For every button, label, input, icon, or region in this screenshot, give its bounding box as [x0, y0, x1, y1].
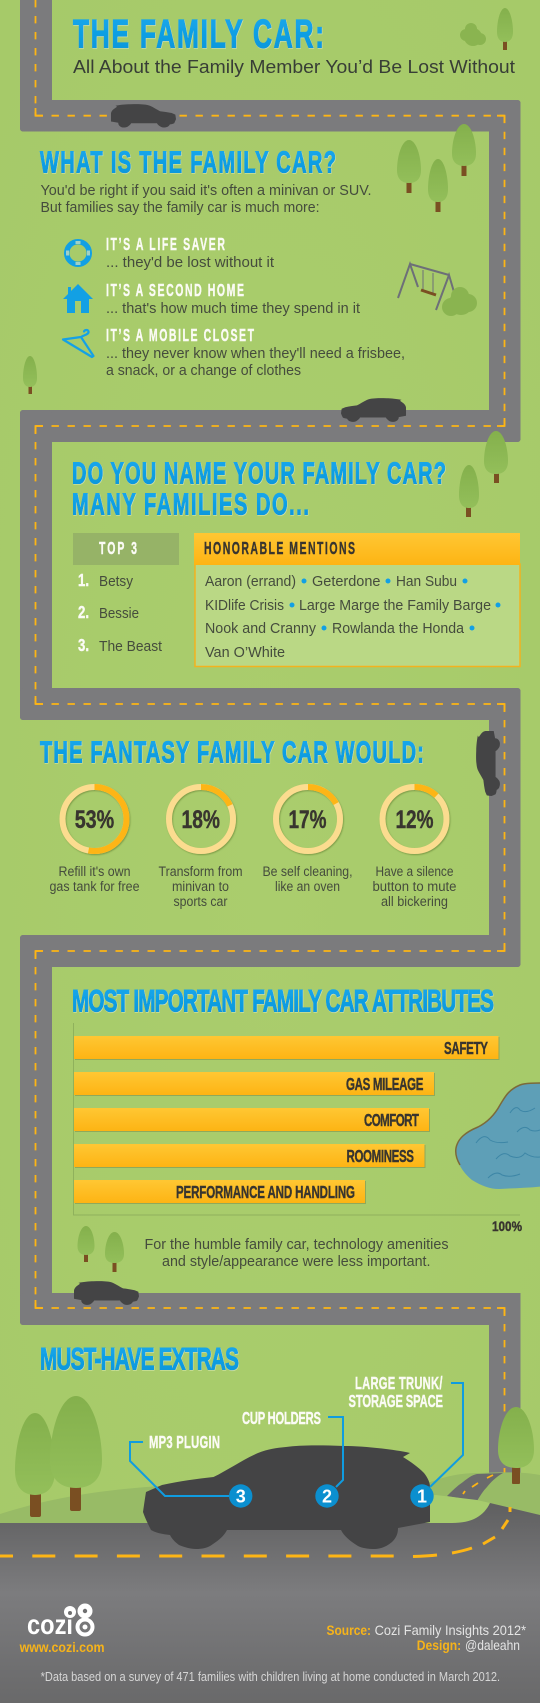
bar: roominess: [74, 1144, 426, 1168]
callout: mp3 plugin: 3: [236, 1486, 246, 1506]
heading: MANY FAMILIES DO...: [72, 489, 309, 522]
icon: tree top right: [497, 8, 513, 50]
donut 53 percent: Refill it's own: [58, 864, 130, 879]
section: what is the family car: [40, 147, 405, 379]
intro text: You'd be right if you said it's often a minivan or SUV.: [40, 182, 372, 199]
panel: honorable mentions: Van O’White: [205, 644, 285, 661]
panel: honorable mentions: Han Subu: [396, 573, 457, 590]
donut 17 percent: [262, 787, 352, 894]
bar: gas mileage: GAS MILEAGE: [346, 1076, 424, 1095]
panel: honorable mentions: Geterdone: [312, 573, 380, 590]
section: fantasy family car: [40, 737, 456, 909]
ground road: [0, 1503, 540, 1703]
panel: honorable mentions: HONORABLE MENTIONS: [204, 539, 355, 559]
donut 18 percent: 18%: [182, 806, 220, 834]
donut 53 percent: [50, 787, 140, 894]
callout: large trunk: [348, 1375, 463, 1508]
callout: cup holders: [242, 1410, 343, 1508]
donut 18 percent: [158, 787, 242, 909]
donut 17 percent: Be self cleaning,: [262, 864, 352, 879]
icon: tree on right: [498, 1407, 534, 1484]
icon: bush top right: [460, 23, 486, 46]
callout: cup holders: 2: [322, 1486, 332, 1506]
panel: top 3: TOP 3: [99, 539, 137, 559]
intro text: [40, 182, 372, 216]
callout: mp3 plugin: [130, 1434, 252, 1508]
hill: [0, 1472, 540, 1530]
road centre dashes: [36, 0, 504, 1474]
icon: car on second road: [341, 398, 406, 422]
callout: large trunk: 1: [417, 1486, 427, 1506]
source credit: [326, 1622, 527, 1653]
item: mobile closet: ... they never know when they'll need a frisbee,: [106, 345, 405, 362]
item: mobile closet: [106, 326, 405, 379]
source credit: Design:: [417, 1637, 461, 1653]
section: attributes: [72, 983, 522, 1270]
panel: top 3: 2.: [78, 602, 89, 622]
donut 17 percent: 17%: [288, 806, 326, 834]
panel: top 3: 3.: [78, 635, 89, 655]
light grass verge: [420, 1495, 490, 1526]
item: life saver: IT’S A LIFE SAVER: [106, 235, 225, 255]
item: life saver: [106, 235, 275, 271]
heading: [72, 458, 446, 522]
axis label: 100%: [492, 1218, 522, 1234]
heading: WHAT IS THE FAMILY CAR?: [40, 147, 336, 180]
callout: large trunk: LARGE TRUNK/: [355, 1375, 442, 1394]
icon: house: [63, 284, 93, 313]
item: second home: ... that's how much time they spend in it: [106, 300, 361, 317]
heading: THE FANTASY FAMILY CAR WOULD:: [40, 737, 424, 770]
item: mobile closet: a snack, or a change of clothes: [106, 362, 301, 379]
bar: performance and handling: PERFORMANCE AND HANDLING: [176, 1184, 355, 1203]
donut 18 percent: sports car: [174, 894, 228, 909]
panel: top 3: [73, 533, 179, 655]
icon: trees section two: [459, 431, 508, 517]
callout: mp3 plugin: MP3 PLUGIN: [149, 1434, 220, 1453]
heading: DO YOU NAME YOUR FAMILY CAR?: [72, 458, 446, 491]
source credit: Source:: [326, 1622, 371, 1638]
bar: performance and handling: [74, 1180, 366, 1204]
icon: tree group section one: [397, 124, 476, 212]
panel: top 3: Bessie: [99, 605, 139, 622]
icon: hanger: [63, 330, 94, 357]
icon: small tree left: [23, 356, 37, 394]
icon: bush by swing: [442, 287, 477, 316]
donut 18 percent: minivan to: [172, 879, 229, 894]
donut 18 percent: Transform from: [158, 864, 242, 879]
intro text: But families say the family car is much more:: [40, 199, 320, 216]
item: life saver: ... they'd be lost without it: [106, 254, 275, 271]
subtitle: All About the Family Member You’d Be Lost Without: [73, 56, 515, 77]
heading: MOST IMPORTANT FAMILY CAR ATTRIBUTES: [72, 983, 494, 1019]
callout: cup holders: CUP HOLDERS: [242, 1410, 321, 1429]
item: second home: IT’S A SECOND HOME: [106, 281, 244, 301]
donut 12 percent: [372, 787, 456, 909]
heading: must-have extras: MUST-HAVE EXTRAS: [40, 1341, 239, 1377]
note: [144, 1236, 448, 1270]
donut 12 percent: Have a silence: [376, 864, 454, 879]
icon: car on fourth road: [74, 1281, 139, 1305]
donut 12 percent: button to mute: [372, 879, 456, 894]
panel: honorable mentions: KIDlife Crisis: [205, 597, 284, 614]
icon: large trees: [15, 1396, 102, 1517]
bar: gas mileage: [74, 1072, 435, 1096]
section: car names: [72, 458, 520, 666]
donut 53 percent: gas tank for free: [50, 879, 140, 894]
title: THE FAMILY CAR:: [73, 12, 324, 57]
icon: swing set: [398, 264, 454, 310]
icon: curving side road: [447, 1473, 503, 1501]
source credit: @daleahn: [465, 1637, 520, 1653]
bar: comfort: [74, 1108, 430, 1132]
bar chart: [74, 1023, 522, 1234]
icon: large car: [143, 1445, 430, 1549]
panel: honorable mentions: Rowlanda the Honda: [332, 620, 465, 637]
donut 12 percent: all bickering: [381, 894, 448, 909]
panel: honorable mentions: [194, 533, 520, 666]
item: second home: [106, 281, 361, 317]
donut 53 percent: 53%: [75, 806, 114, 834]
bar: safety: [74, 1036, 500, 1060]
note: For the humble family car, technology amenities: [144, 1236, 448, 1253]
item: mobile closet: IT’S A MOBILE CLOSET: [106, 326, 254, 346]
panel: honorable mentions: Large Marge the Family Barge: [299, 597, 491, 614]
title block: [73, 12, 515, 77]
panel: honorable mentions: Nook and Cranny: [205, 620, 316, 637]
website link: www.cozi.com: [19, 1639, 105, 1655]
icon: car on first road: [111, 104, 176, 128]
panel: top 3: Betsy: [99, 573, 133, 590]
bar: safety: SAFETY: [444, 1040, 488, 1059]
donut 17 percent: like an oven: [275, 879, 340, 894]
donut 12 percent: 12%: [396, 806, 434, 834]
source credit: Cozi Family Insights 2012*: [375, 1622, 527, 1638]
panel: top 3: 1.: [78, 570, 89, 590]
icon: life saver: [66, 241, 90, 265]
bar: roominess: ROOMINESS: [346, 1148, 414, 1167]
icon: vertical car on third road: [476, 731, 500, 796]
note: and style/appearance were less important.: [162, 1253, 430, 1270]
callout: large trunk: STORAGE SPACE: [348, 1393, 443, 1412]
bar: comfort: COMFORT: [364, 1112, 419, 1131]
panel: top 3: The Beast: [99, 638, 163, 655]
icon: pond: [456, 1083, 540, 1189]
logo: cozi: cozi: [27, 1609, 73, 1640]
panel: honorable mentions: Aaron (errand): [205, 573, 296, 590]
icon: small trees: [78, 1226, 124, 1272]
